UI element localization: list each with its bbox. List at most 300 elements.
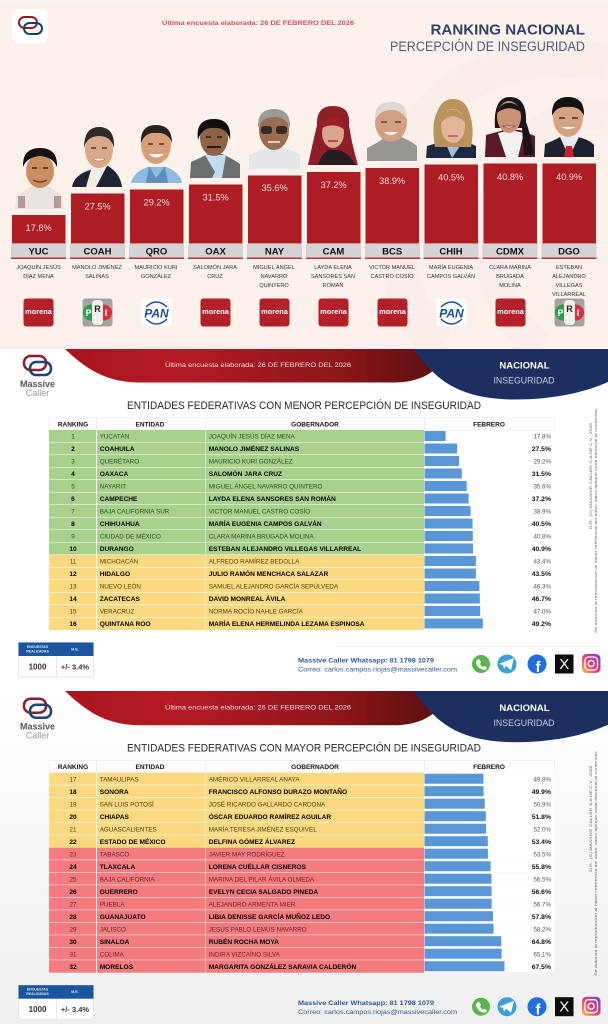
survey box	[18, 642, 94, 677]
photo: Miguel Ángel Navarro	[249, 109, 300, 169]
panel: ranking nacional	[0, 0, 608, 346]
survey box: 1000	[29, 662, 47, 672]
bar: NAY: 35.6%	[262, 183, 288, 193]
row 18: 18	[69, 789, 77, 796]
table header: FEBRERO	[473, 764, 505, 771]
party logo: morena BCS	[378, 298, 408, 326]
bar: COAH: 27.5%	[85, 202, 111, 212]
row 3: QUERÉTARO	[100, 457, 139, 466]
header swoosh: red	[65, 349, 434, 382]
governor names: DÍAZ MENA	[23, 273, 54, 280]
row 27: PUEBLA	[100, 901, 125, 908]
row 28: GUANAJUATO	[100, 914, 146, 921]
row 30	[49, 935, 554, 947]
row 22: ESTADO DE MÉXICO	[100, 837, 166, 846]
table header	[49, 418, 554, 430]
row 22: DELFINA GÓMEZ ÁLVAREZ	[209, 837, 295, 846]
row 20	[49, 810, 554, 822]
row 19: 19	[69, 801, 77, 808]
governor names: SANSORES SAN	[311, 274, 355, 280]
row 7: 7	[71, 509, 75, 516]
row 11: ALFREDO RAMÍREZ BEDOLLA	[209, 557, 300, 566]
survey box: ENCUESTAS	[27, 645, 49, 649]
row 12	[49, 568, 551, 580]
icon: whatsapp	[472, 998, 490, 1016]
row 21: AGUASCALIENTES	[100, 826, 157, 833]
logo: Massive Caller: Massive	[20, 722, 55, 732]
photo: Layda Sansores	[308, 106, 358, 165]
row 25: BAJA CALIFORNIA	[100, 876, 155, 883]
bar: CAM: 37.2%	[321, 180, 347, 190]
bar: CDMX	[484, 164, 537, 244]
icon: telegram	[498, 997, 516, 1016]
state labels: BCS	[382, 246, 402, 258]
row 19: JOSÉ RICARDO GALLARDO CARDONA	[209, 799, 326, 808]
bar: OAX	[189, 184, 242, 244]
governor names: GONZÁLEZ	[141, 273, 172, 280]
title	[390, 22, 585, 54]
bar: BCS: 38.9%	[379, 176, 405, 186]
row 30: SINALOA	[100, 939, 130, 946]
row 30: RUBÉN ROCHA MOYA	[209, 937, 279, 946]
row 6: LAYDA ELENA SANSORES SAN ROMÁN	[209, 494, 336, 503]
governor names: ALEJANDRO	[552, 274, 586, 280]
row 3	[49, 455, 551, 467]
party logo: PRI COAH	[82, 298, 112, 326]
row 4	[49, 468, 551, 480]
header title: INSEGURIDAD	[493, 376, 555, 386]
table header: RANKING	[58, 422, 88, 428]
icon: facebook: f	[536, 1002, 542, 1019]
row 28: LIBIA DENISSE GARCÍA MUÑOZ LEDO	[209, 912, 330, 921]
survey box: M.E.	[71, 648, 79, 652]
row 7: VICTOR MANUEL CASTRO COSÍO	[209, 507, 310, 516]
survey box: ENCUESTAS	[27, 988, 49, 992]
party logo: morena YUC: morena	[25, 307, 53, 316]
row 23: JAVIER MAY RODRÍGUEZ	[209, 849, 285, 858]
party logo: PAN CHIH: PAN	[439, 306, 464, 320]
bar: COAH	[71, 194, 124, 244]
title: RANKING NACIONAL	[430, 22, 585, 38]
row 26: 56.6%	[532, 889, 551, 896]
row 2: 27.5%	[532, 446, 551, 453]
row 2: 2	[71, 446, 75, 453]
contact info: Massive Caller Whatsapp: 81 1798 1079	[298, 658, 434, 664]
bar: CDMX: 40.8%	[497, 172, 523, 182]
table header: GOBERNADOR	[291, 764, 339, 771]
table header: ENTIDAD	[136, 764, 165, 771]
row 18: 49.9%	[532, 789, 551, 796]
party logo: PRI DGO: R	[566, 304, 573, 314]
table: mayor percepción	[49, 761, 554, 973]
row 26: GUERRERO	[100, 889, 138, 896]
bar: QRO	[130, 190, 184, 244]
header title: NACIONAL	[499, 360, 550, 372]
row 14: ZACATECAS	[100, 596, 140, 603]
table header: ENTIDAD	[136, 422, 165, 428]
row 28	[49, 910, 554, 922]
row 20: 20	[69, 814, 77, 821]
governor names: CRUZ	[207, 274, 223, 280]
governor names: SALOMÓN JARA	[193, 264, 237, 271]
row 31	[49, 948, 554, 960]
row 21: 21	[69, 826, 77, 833]
row 22	[49, 835, 554, 848]
row 5: 5	[71, 484, 75, 491]
row 6	[49, 492, 551, 504]
row 3: 29.2%	[533, 459, 551, 466]
icon: X: X	[559, 656, 569, 673]
row 17: 17	[69, 776, 77, 783]
logo: Massive Caller: Caller	[26, 731, 49, 741]
row 29: JALISCO	[100, 926, 126, 933]
row 10: DURANGO	[100, 546, 134, 553]
row 16: MARÍA ELENA HERMELINDA LEZAMA ESPINOSA	[209, 619, 365, 628]
row 25: 56.5%	[533, 876, 551, 883]
row 10: ESTEBAN ALEJANDRO VILLEGAS VILLARREAL	[209, 546, 361, 553]
state labels: CAM	[323, 246, 344, 258]
party logo: PRI DGO	[554, 298, 584, 326]
row 31: INDIRA VIZCAÍNO SILVA	[209, 949, 281, 958]
panel: menor percepción	[0, 346, 608, 689]
row 23	[49, 848, 554, 860]
row 8: MARÍA EUGENIA CAMPOS GALVÁN	[209, 519, 322, 528]
governor names: MARÍA EUGENIA	[429, 264, 473, 271]
header title	[493, 360, 555, 386]
row 24	[49, 860, 554, 872]
icon: X: X	[559, 999, 569, 1016]
row 13	[49, 580, 551, 592]
governor names: VICTOR MANUEL	[369, 265, 415, 271]
logo: Massive Caller: Massive	[20, 379, 55, 389]
row 15: NORMA ROCÍO NAHLE GARCÍA	[209, 607, 304, 616]
row 22: 22	[69, 839, 77, 846]
contact info: Correo: carlos.campos.riojas@massivecaller.com	[298, 666, 457, 674]
legal note	[589, 751, 598, 976]
row 13: SAMUEL ALEJANDRO GARCÍA SEPÚLVEDA	[209, 582, 339, 591]
legal note: D.R., (C) MASSIVE CALLER S.A DE C.V., 2026	[589, 423, 593, 529]
row 20: CHIAPAS	[100, 814, 129, 821]
survey date: Última encuesta elaborada: 26 DE FEBRERO DEL 2026	[165, 360, 351, 369]
photo: Esteban Villegas	[544, 97, 594, 157]
row 19	[49, 798, 554, 810]
row 30: 30	[69, 939, 77, 946]
row 25	[49, 873, 554, 885]
row 29: 29	[69, 926, 77, 933]
survey box: REALIZADAS	[26, 650, 49, 654]
party logo: PAN QRO: PAN	[144, 306, 169, 320]
row 11: MICHOACÁN	[100, 557, 139, 566]
row 9: 40.8%	[533, 534, 551, 541]
table header: GOBERNADOR	[291, 422, 339, 428]
row 28: 28	[69, 914, 77, 921]
row 24: 24	[69, 864, 77, 871]
party logo: PRI COAH: I	[105, 308, 107, 318]
survey box: +/- 3.4%	[61, 662, 89, 672]
icon: instagram	[582, 654, 600, 673]
row 14: 46.7%	[532, 596, 551, 603]
row 6: 6	[71, 496, 75, 503]
logo: Massive Caller badge	[12, 9, 48, 43]
row 12: JULIO RAMÓN MENCHACA SALAZAR	[209, 569, 328, 578]
row 26: 26	[69, 889, 77, 896]
row 4: OAXACA	[100, 471, 129, 478]
icon: facebook: f	[536, 659, 542, 676]
row 5: 35.6%	[533, 484, 551, 491]
table title: ENTIDADES FEDERATIVAS CON MAYOR PERCEPCIÓN DE INSEGURIDAD	[127, 742, 481, 755]
row 32: 67.5%	[532, 964, 551, 971]
photo: María Eugenia Campos	[426, 99, 476, 158]
row 26: EVELYN CECIA SALGADO PINEDA	[209, 889, 318, 896]
legal note: D.R., (C) MASSIVE CALLER S.A DE C.V., 2026	[589, 766, 593, 872]
panel: mayor percepción	[0, 689, 608, 1024]
governor names: ESTEBAN	[556, 265, 582, 271]
survey box	[18, 985, 94, 1020]
header swoosh: navy	[413, 691, 608, 742]
governor names: CAMPOS GALVÁN	[427, 273, 475, 280]
party logo: morena CDMX: morena	[497, 307, 525, 316]
survey box: REALIZADAS	[26, 992, 49, 996]
bar: QRO: 29.2%	[144, 198, 170, 208]
governor names: VILLEGAS	[555, 283, 583, 289]
bar: BCS	[366, 168, 419, 244]
row 12: HIDALGO	[100, 571, 130, 578]
row 14	[49, 592, 551, 604]
party logo: PRI DGO: I	[577, 308, 579, 318]
header swoosh: red	[65, 691, 434, 725]
row 17: AMÉRICO VILLARREAL ANAYA	[209, 774, 300, 783]
row 7: 38.9%	[533, 509, 551, 516]
row 27: ALEJANDRO ARMENTA MIER	[209, 901, 296, 908]
governor names: VILLARREAL	[552, 292, 586, 298]
row 32: 32	[69, 964, 77, 971]
contact info	[298, 989, 600, 1016]
row 25: MARINA DEL PILAR ÁVILA OLMEDA	[209, 874, 315, 883]
row 3: MAURICIO KURI GONZÁLEZ	[209, 457, 293, 466]
governor names: LAYDA ELENA	[314, 265, 352, 271]
row 2	[49, 442, 551, 454]
row 8	[49, 518, 551, 530]
row 11	[49, 555, 551, 567]
row 9: CLARA MARINA BRUGADA MOLINA	[209, 534, 314, 541]
photo: Salomón Jara	[190, 119, 240, 178]
row 12: 43.5%	[532, 571, 551, 578]
row 20: 51.8%	[532, 814, 551, 821]
row 17: 49.8%	[533, 776, 551, 783]
row 13: NUEVO LEÓN	[100, 582, 141, 591]
row 7: BAJA CALIFORNIA SUR	[100, 509, 170, 516]
row 6: CAMPECHE	[100, 496, 138, 503]
photo: Manolo Jiménez	[72, 127, 122, 187]
table header	[49, 761, 554, 773]
party logo: PAN QRO	[142, 298, 172, 326]
state labels: NAY	[265, 246, 285, 258]
party logo: morena YUC	[24, 298, 54, 326]
row 8: CHIHUAHUA	[100, 521, 140, 528]
row 27: 56.7%	[533, 901, 551, 908]
row 10	[49, 542, 551, 554]
row 16: 49.2%	[532, 621, 551, 628]
row 3: 3	[71, 459, 75, 466]
row 27	[49, 898, 554, 910]
bar chart: percepción	[12, 164, 596, 244]
header title: NACIONAL	[499, 703, 550, 714]
row 21: 52.0%	[533, 826, 551, 833]
row 14: DAVID MONREAL ÁVILA	[209, 594, 286, 603]
row 5: NAYARIT	[100, 484, 126, 491]
bar: CHIH	[424, 164, 478, 244]
row 18: FRANCISCO ALFONSO DURAZO MONTAÑO	[209, 787, 347, 796]
row 9: CIUDAD DE MÉXICO	[100, 532, 161, 541]
row 17	[49, 773, 554, 785]
row 31: COLIMA	[100, 951, 125, 958]
row 10: 10	[69, 546, 77, 553]
governor names: CASTRO COSÍO	[371, 273, 414, 280]
row 16: 16	[69, 621, 77, 628]
row 2: COAHUILA	[100, 446, 135, 453]
row 20: ÓSCAR EDUARDO RAMÍREZ AGUILAR	[209, 812, 331, 821]
row 19: SAN LUIS POTOSÍ	[100, 799, 154, 808]
row 7	[49, 505, 551, 517]
icon: telegram	[498, 654, 516, 674]
row 24: LORENA CUÉLLAR CISNEROS	[209, 862, 307, 871]
party logo: morena BCS: morena	[379, 307, 407, 316]
row 23: 23	[69, 851, 77, 858]
row 15: 15	[69, 609, 77, 616]
governor names: MOLINA	[499, 283, 521, 289]
row 5	[49, 480, 551, 492]
survey date: Última encuesta elaborada: 26 DE FEBRERO DEL 2026	[162, 18, 354, 27]
row 29: JESÚS PABLO LEMUS NAVARRO	[209, 924, 307, 933]
icon: whatsapp	[472, 655, 490, 673]
table header: FEBRERO	[473, 422, 505, 428]
table title: ENTIDADES FEDERATIVAS CON MENOR PERCEPCIÓN DE INSEGURIDAD	[127, 399, 481, 412]
row 4: SALOMÓN JARA CRUZ	[209, 469, 282, 478]
party logo: morena CAM: morena	[320, 307, 348, 316]
row 27: 27	[69, 901, 77, 908]
row 22: 53.4%	[532, 839, 551, 846]
icon: instagram	[582, 997, 600, 1016]
legal note: Se autoriza la reproducción al hacer referencia del autor, salvo aplique veda electoral al contenido.	[594, 408, 598, 633]
bar: YUC: 17.8%	[26, 223, 52, 233]
logo: Massive Caller: Caller	[26, 388, 49, 398]
row 5: MIGUEL ÁNGEL NAVARRO QUINTERO	[209, 482, 323, 491]
photo: Mauricio Kuri	[131, 125, 182, 183]
governor names: BRUGADA	[496, 274, 524, 280]
state labels: CHIH	[439, 246, 463, 258]
row 28: 57.8%	[532, 914, 551, 921]
row 8: 40.5%	[532, 521, 551, 528]
party logo: PRI COAH: P	[85, 308, 92, 318]
row 31: 31	[69, 951, 77, 958]
row 1: 17.8%	[533, 434, 551, 441]
row 30: 64.8%	[532, 939, 551, 946]
row 14: 14	[69, 596, 77, 603]
party logo: PRI DGO: P	[557, 308, 564, 318]
party logo: morena CDMX	[496, 298, 526, 326]
contact info: Massive Caller Whatsapp: 81 1798 1079	[298, 1000, 434, 1007]
row 1: 1	[71, 434, 75, 441]
row 29	[49, 923, 554, 935]
row 23: 53.5%	[533, 851, 551, 858]
row 21: MARÍA TERESA JIMÉNEZ ESQUIVEL	[209, 824, 317, 833]
party logo: morena CAM	[318, 298, 348, 326]
row 1: JOAQUÍN JESÚS DÍAZ MENA	[209, 432, 296, 441]
survey box: M.E.	[71, 990, 79, 994]
governor names: SALINAS	[85, 274, 109, 280]
icon: X	[555, 654, 574, 674]
bar: CAM	[307, 172, 360, 244]
governor names: MAURICIO KURI	[135, 265, 178, 271]
row 11: 43.4%	[533, 559, 551, 566]
legal note	[589, 408, 598, 633]
icon: facebook	[528, 997, 546, 1019]
governor names: JOAQUÍN JESÚS	[16, 264, 61, 271]
table header: RANKING	[58, 764, 88, 771]
bar: DGO: 40.9%	[556, 172, 582, 182]
photo: Joaquín Díaz Mena	[15, 148, 64, 209]
row 9	[49, 530, 551, 542]
logo: Massive Caller	[20, 699, 55, 741]
row 24: 55.8%	[532, 864, 551, 871]
governor names	[16, 264, 586, 298]
bar: YUC	[12, 215, 66, 244]
row 10: 40.9%	[532, 546, 551, 553]
row 17: TAMAULIPAS	[100, 776, 139, 783]
row 11: 11	[70, 559, 77, 566]
governor names: NAVARRO	[261, 274, 288, 280]
bar: OAX: 31.5%	[203, 192, 229, 202]
row 2: MANOLO JIMÉNEZ SALINAS	[209, 444, 300, 453]
party logo: morena OAX: morena	[202, 307, 230, 316]
row 4: 4	[71, 471, 75, 478]
bar: DGO	[542, 164, 596, 244]
row 16	[49, 618, 551, 630]
row 4: 31.5%	[532, 471, 551, 478]
state labels	[11, 244, 596, 259]
row 18: SONORA	[100, 789, 129, 796]
governor names: QUINTERO	[259, 283, 289, 289]
row 15	[49, 605, 551, 617]
party logo: PAN CHIH	[436, 298, 466, 326]
row 31: 65.1%	[533, 951, 551, 958]
state labels: OAX	[205, 246, 226, 258]
row 32: MORELOS	[100, 964, 134, 971]
header title	[493, 703, 555, 728]
row 15: VERACRUZ	[100, 609, 134, 616]
survey date: Última encuesta elaborada: 26 DE FEBRERO DEL 2026	[165, 703, 351, 712]
table: menor percepción	[49, 418, 554, 630]
header title: INSEGURIDAD	[493, 718, 555, 728]
bar: NAY	[248, 176, 302, 244]
contact info: Correo: carlos.campos.riojas@massivecaller.com	[298, 1009, 457, 1016]
row 26	[49, 885, 554, 897]
photo: Víctor Castro	[367, 102, 417, 161]
contact info	[298, 646, 600, 674]
legal note: Se autoriza la reproducción al hacer referencia del autor, salvo aplique veda electoral al contenido.	[594, 751, 598, 976]
governor names: CLARA MARINA	[489, 265, 531, 271]
icon: facebook	[528, 654, 546, 676]
state labels: COAH	[84, 246, 112, 258]
row 18	[49, 785, 554, 797]
row 9: 9	[71, 534, 75, 541]
photo: Clara Brugada	[485, 97, 535, 157]
survey box: +/- 3.4%	[61, 1005, 89, 1014]
state labels: QRO	[146, 246, 167, 258]
row 15: 47.0%	[533, 609, 551, 616]
row 21	[49, 823, 554, 835]
governor names: MIGUEL ÁNGEL	[253, 264, 295, 271]
